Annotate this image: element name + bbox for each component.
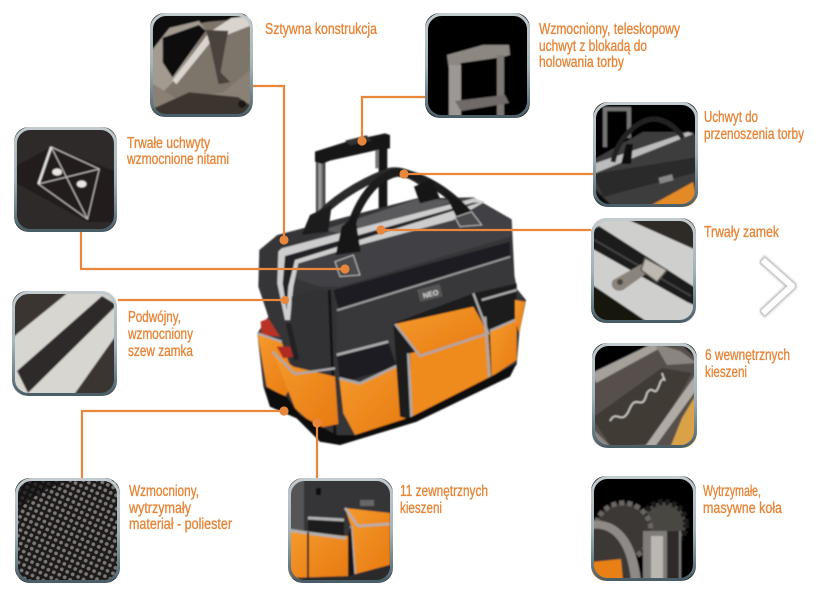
bag body <box>257 197 526 445</box>
label: Wytrzymałe, masywne koła: Wytrzymałe, <box>703 483 761 500</box>
label: Trwałe uchwyty wzmocnione nitami <box>126 135 229 168</box>
connector: trwałe uchwyty <box>81 232 345 269</box>
label: Wzmocniony, teleskopowy uchwyt: Wzmocniony, teleskopowy <box>539 21 680 38</box>
label: Trwały zamek: Trwały zamek <box>704 224 779 241</box>
bag top lid <box>278 198 512 287</box>
front panel <box>337 258 517 377</box>
label: 11 zewnętrznych kieszeni <box>400 483 488 517</box>
thumbnail: trwałe uchwyty <box>14 127 117 232</box>
NEO label: NEO <box>422 288 440 300</box>
label: 11 zewnętrznych kieszeni: kieszeni <box>400 500 442 517</box>
label: 6 wewnętrznych kieszeni: 6 wewnętrznych <box>705 347 790 364</box>
NEO label <box>417 284 443 302</box>
label: Sztywna konstrukcja: Sztywna konstrukcja <box>265 21 377 38</box>
mesh front band <box>333 242 510 308</box>
connector: podwójny szew <box>118 299 285 301</box>
thumbnail: teleskopowy uchwyt <box>425 13 530 120</box>
callout dots <box>279 136 409 428</box>
label: Podwójny, wzmocniony szew zamka: szew zamka <box>128 343 193 360</box>
label: Podwójny, wzmocniony szew zamka: Podwójny, <box>128 309 181 326</box>
label: 6 wewnętrznych kieszeni: kieszeni <box>705 364 747 381</box>
zipper bands <box>277 198 485 320</box>
side panel <box>290 288 338 437</box>
label: Wzmocniony, wytrzymały materiał: wytrzymały <box>128 500 191 517</box>
telescopic handle <box>315 133 390 213</box>
base and wheels <box>264 363 517 445</box>
label: Wzmocniony, wytrzymały materiał: Wzmocniony, <box>129 483 199 500</box>
connector: materiał poliester <box>82 411 284 478</box>
label: Uchwyt do przenoszenia torby: Uchwyt do <box>704 109 758 126</box>
large flap pocket <box>393 283 525 422</box>
label: Wzmocniony, wytrzymały materiał: materiał - poliester <box>129 516 232 533</box>
label: 6 wewnętrznych kieszeni <box>705 347 790 381</box>
left side pockets <box>257 318 338 428</box>
thumbnail: materiał poliester <box>15 478 120 583</box>
connector: teleskopowy uchwyt <box>362 97 425 141</box>
label: Uchwyt do przenoszenia torby <box>704 109 804 143</box>
label: Wzmocniony, teleskopowy uchwyt: holowania torby <box>539 54 624 71</box>
label: Wytrzymałe, masywne koła <box>703 483 782 517</box>
connector: uchwyt do przenoszenia <box>404 173 593 175</box>
label: Trwałe uchwyty wzmocnione nitami: wzmocnione nitami <box>126 151 229 168</box>
connector: Sztywna konstrukcja <box>252 86 284 240</box>
thumbnail: uchwyt do przenoszenia <box>593 102 698 207</box>
label: Wzmocniony, wytrzymały materiał <box>128 483 232 533</box>
label: Podwójny, wzmocniony szew zamka: wzmocniony <box>127 326 193 343</box>
connector: trwały zamek <box>381 229 591 231</box>
thumbnail: trwały zamek <box>591 218 696 323</box>
label: Trwałe uchwyty wzmocnione nitami: Trwałe uchwyty <box>127 135 210 152</box>
label: Wzmocniony, teleskopowy uchwyt <box>539 21 680 71</box>
thumbnail: podwójny szew <box>12 291 117 396</box>
thumbnail: 6 wewnętrznych kieszeni <box>592 343 697 448</box>
front small pockets <box>337 342 407 435</box>
thumbnail: sztywna konstrukcja <box>150 13 253 117</box>
thumbnail: 11 zewnętrznych kieszeni <box>288 478 393 583</box>
label: Wzmocniony, teleskopowy uchwyt: uchwyt z blokadą do <box>539 38 647 55</box>
bag illustration <box>257 133 526 445</box>
next arrow <box>765 262 792 311</box>
connector: zewnętrzne kieszenie <box>316 423 318 478</box>
carry handles <box>302 171 482 277</box>
label: Podwójny, wzmocniony szew zamka <box>127 309 193 360</box>
label: 11 zewnętrznych kieszeni: 11 zewnętrznych <box>400 483 488 500</box>
label: Wytrzymałe, masywne koła: masywne koła <box>703 500 782 517</box>
thumbnail: masywne koła <box>591 476 696 581</box>
